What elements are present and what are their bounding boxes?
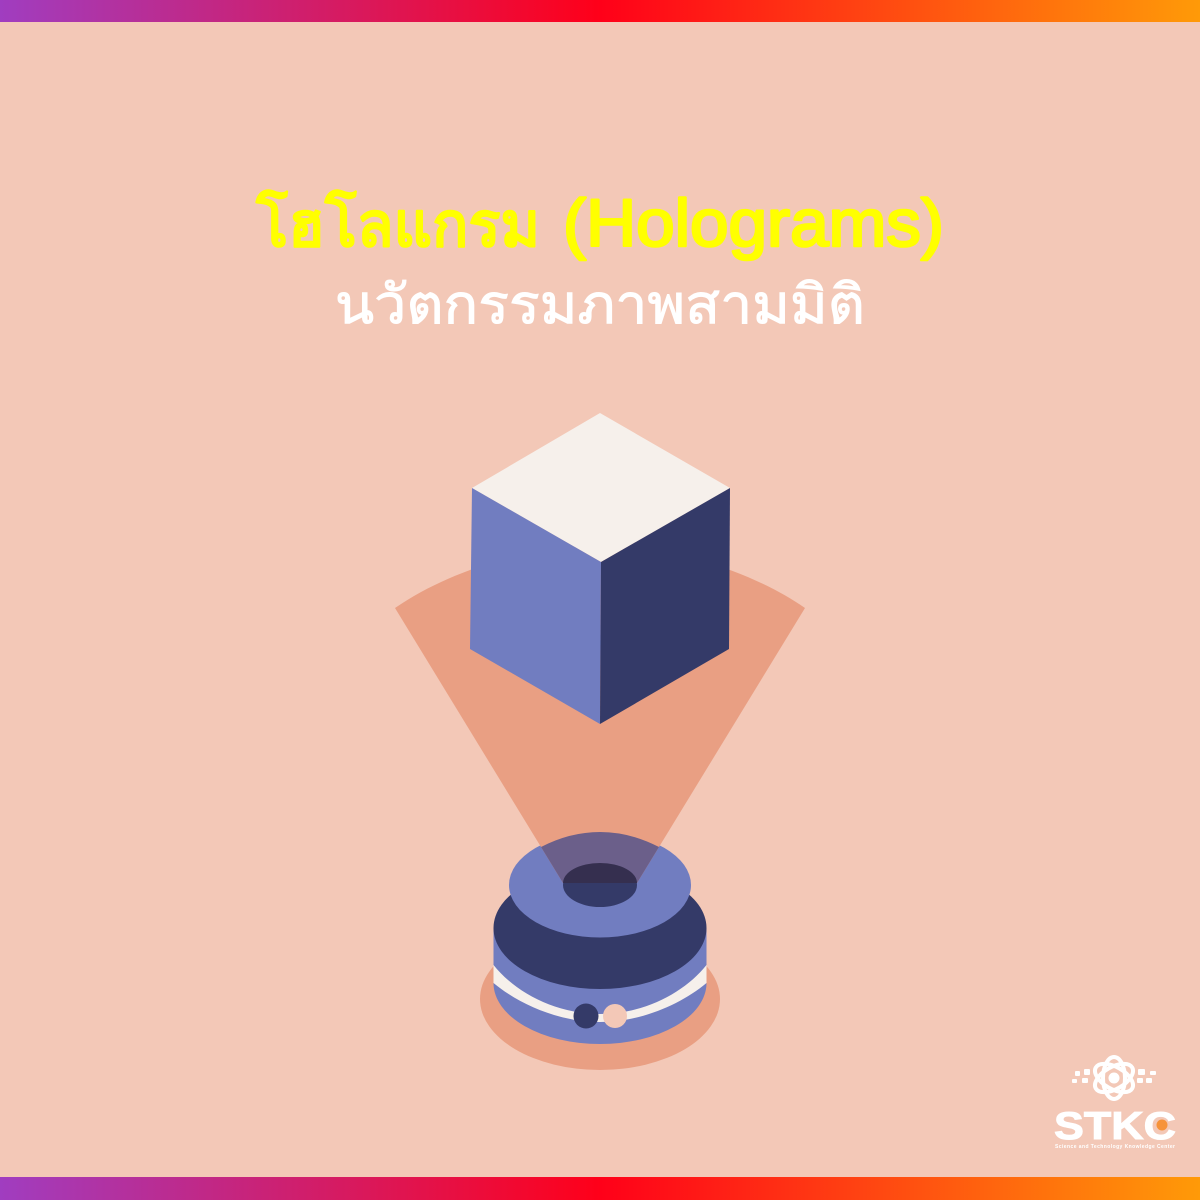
top ring [509, 832, 691, 938]
ring hole [563, 863, 637, 907]
logo wordmark: STKC [1054, 1105, 1176, 1148]
logo orange dot [1156, 1120, 1168, 1130]
subtitle: นวัตกรรมภาพสามมิติ [335, 275, 865, 335]
lower cylinder body [494, 928, 706, 1044]
dark cylinder top [494, 867, 706, 989]
cube [470, 413, 730, 724]
title [256, 186, 944, 261]
button dark [574, 1004, 598, 1028]
light beam [395, 546, 805, 883]
top gradient bar [0, 0, 1200, 22]
logo tagline: Science and Technology Knowledge Center [1055, 1144, 1175, 1150]
cube left face [470, 488, 601, 724]
title: โฮโลแกรม [256, 190, 540, 260]
cube top face [472, 413, 730, 562]
atom icon [1090, 1057, 1138, 1099]
base shadow ellipse [480, 928, 720, 1070]
button light [603, 1004, 627, 1028]
beam over hole [563, 863, 637, 883]
projector [480, 832, 720, 1070]
cube right face [600, 488, 730, 724]
white band [494, 965, 706, 1022]
bottom gradient bar [0, 1177, 1200, 1200]
logo dots [1072, 1069, 1156, 1083]
beam over ring [541, 832, 659, 883]
title: (Holograms) [563, 186, 944, 261]
